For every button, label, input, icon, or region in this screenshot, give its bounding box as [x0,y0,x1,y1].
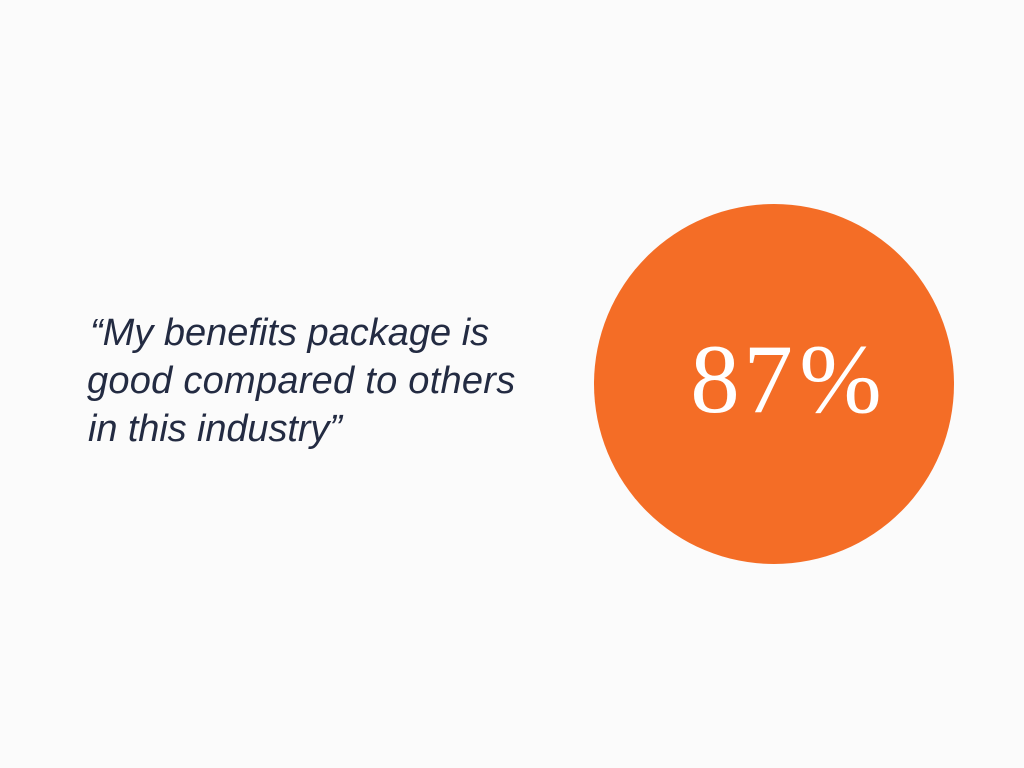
quote text: in this industry” [88,408,342,450]
statistic: 87%: 87% [690,325,882,434]
quote text: “My benefits package is [90,312,489,354]
quote text: good compared to others [87,360,515,402]
orange stat circle [594,204,954,564]
quote text [87,312,515,450]
